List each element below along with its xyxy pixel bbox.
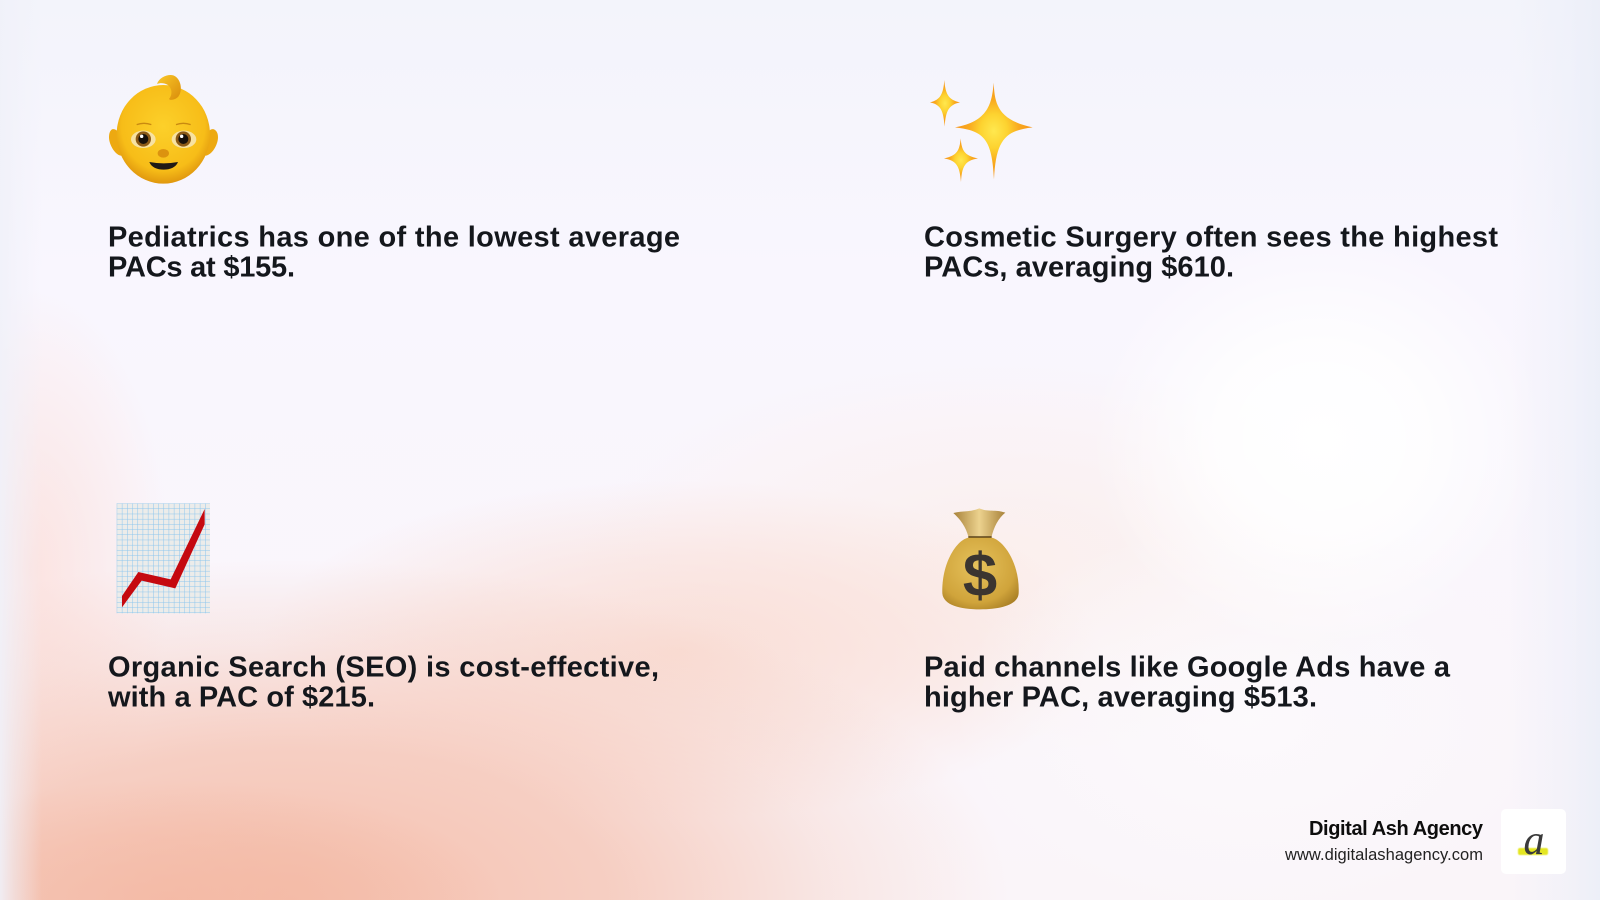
footer: agency name and url: Digital Ash Agency [1309,818,1484,840]
icon: baby face [109,75,218,184]
icon: chart increasing [117,503,210,613]
footer: agency name and url [1284,818,1484,864]
text block: paid channels [924,652,1451,714]
icon: money bag: $ [963,541,997,610]
icon: money bag [942,508,1019,610]
text block: pediatrics [108,222,680,284]
footer: logo [1501,809,1566,874]
icon: sparkles [930,80,1033,182]
text block: organic search: with a PAC of $215. [107,682,375,714]
text block: cosmetic surgery: Cosmetic Surgery often sees the highest [924,222,1498,254]
text block: organic search: Organic Search (SEO) is cost-effective, [108,652,659,684]
footer: logo: a [1524,818,1544,864]
text block: paid channels: Paid channels like Google Ads have a [924,652,1451,684]
footer: agency name and url: www.digitalashagency.com [1284,846,1483,864]
text block: organic search [107,652,659,714]
text block: cosmetic surgery: PACs, averaging $610. [924,252,1234,284]
text block: cosmetic surgery [924,222,1498,284]
text block: pediatrics: Pediatrics has one of the lowest average [108,222,680,254]
text block: pediatrics: PACs at $155. [108,252,295,284]
text block: paid channels: higher PAC, averaging $513. [924,682,1317,714]
